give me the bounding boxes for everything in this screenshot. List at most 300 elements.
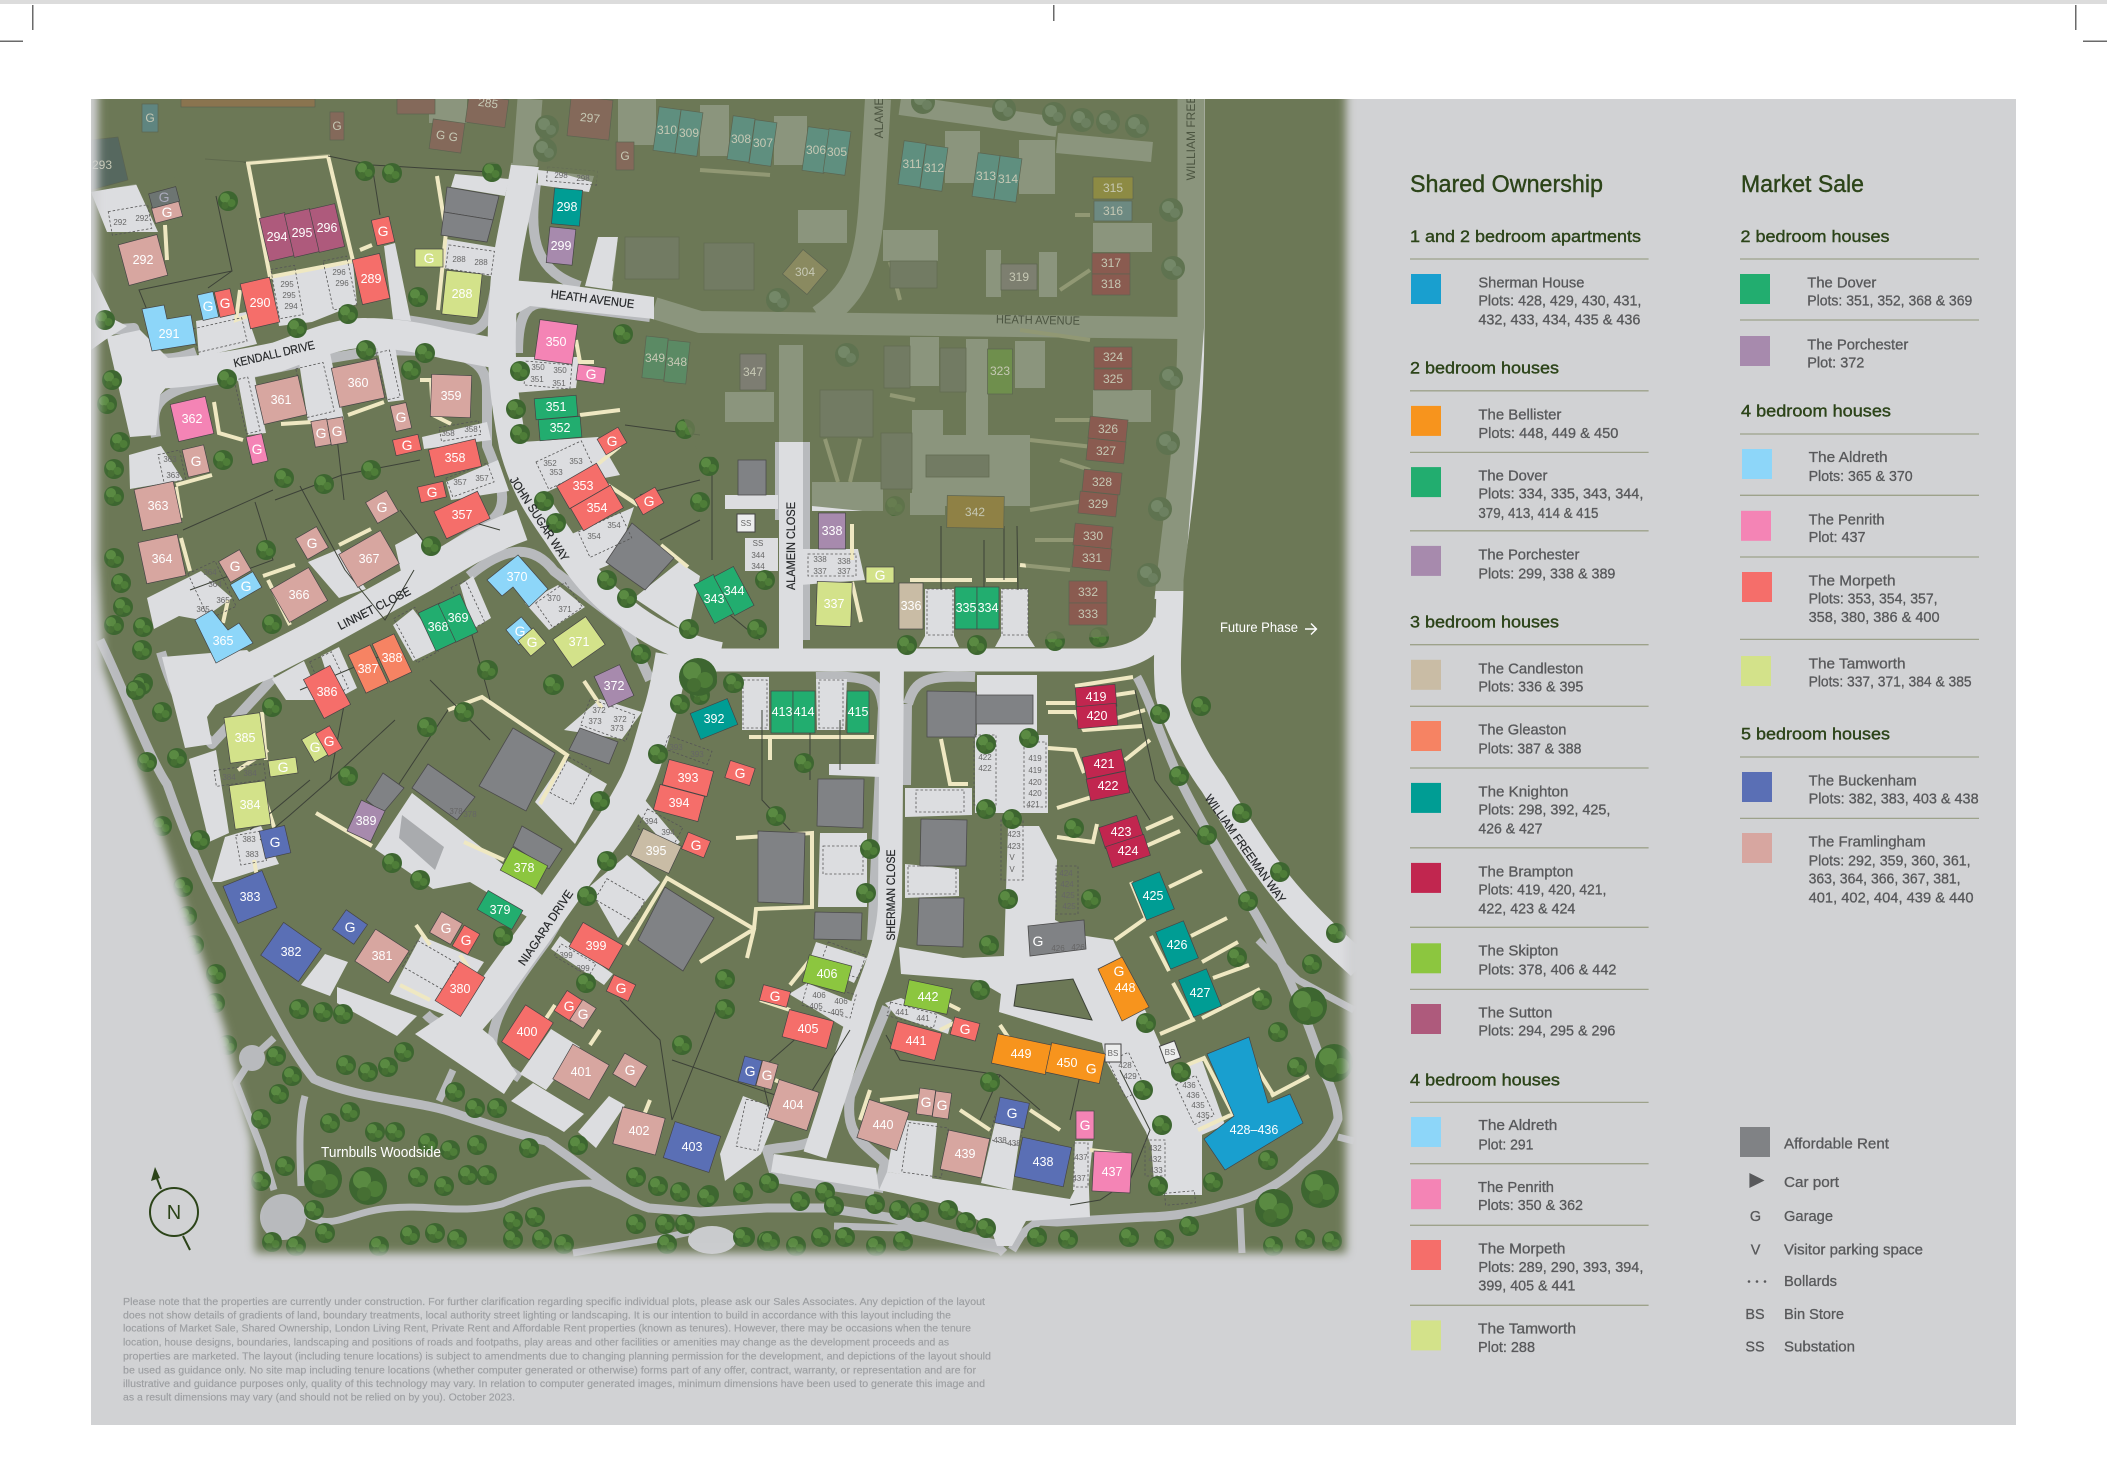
plot 370: 370 xyxy=(507,570,527,584)
faded plots of other phases: 331 xyxy=(1082,551,1102,565)
item: The Penrith xyxy=(1740,511,1979,557)
small parking labels: 420 xyxy=(1028,789,1042,798)
garages: G xyxy=(307,535,317,551)
key: Bollards xyxy=(1748,1274,1837,1290)
item: The Framlingham xyxy=(1742,833,1974,906)
plot 364: 364 xyxy=(152,552,172,566)
plot 386: 386 xyxy=(317,685,337,699)
road names: JOHN SUGAR WAY xyxy=(507,474,572,564)
item: The Morpeth: The Morpeth xyxy=(1809,574,1896,590)
garages: G xyxy=(770,988,780,1004)
faded plots of other phases: 307 xyxy=(753,136,773,150)
small parking labels: 372 xyxy=(613,715,627,724)
small parking labels: 405 xyxy=(830,1008,844,1017)
item: The Knighton: Plots: 298, 392, 425, xyxy=(1478,803,1610,819)
garages: G xyxy=(377,499,387,515)
item: The Bellister: The Bellister xyxy=(1478,407,1562,423)
faded plots of other phases: 319 xyxy=(1009,270,1029,284)
plot 384 xyxy=(229,781,271,829)
plot 299: 299 xyxy=(551,239,571,253)
plot 358 xyxy=(428,439,482,477)
plot 421: 421 xyxy=(1094,757,1114,771)
item: The Porchester: Plot: 372 xyxy=(1807,356,1864,372)
item: The Knighton: 426 & 427 xyxy=(1478,822,1542,838)
faded plots of other phases: HEATH AVENUE xyxy=(996,312,1080,328)
item: The Sutton: Plots: 294, 295 & 296 xyxy=(1478,1024,1615,1040)
plot 449: 449 xyxy=(1011,1047,1031,1061)
plot 392: 392 xyxy=(704,712,724,726)
plot 420 xyxy=(1076,703,1118,729)
garages: G xyxy=(252,441,262,457)
garages: G xyxy=(578,1006,588,1022)
small parking labels: 338 xyxy=(813,555,827,564)
plot 353: 353 xyxy=(573,479,593,493)
garden boundary lines xyxy=(139,156,1200,1205)
plot 450: 450 xyxy=(1057,1056,1077,1070)
small parking labels: 437 xyxy=(1072,1174,1086,1183)
central island xyxy=(1014,979,1092,1020)
key: Affordable Rent xyxy=(1740,1127,1889,1157)
small parking labels: 426 xyxy=(1071,943,1085,952)
small parking labels: 296 xyxy=(335,279,349,288)
item: The Candleston: Plots: 336 & 395 xyxy=(1478,680,1583,696)
key: Substation: SS xyxy=(1745,1339,1765,1355)
small parking labels: 358 xyxy=(464,425,478,434)
garages: G xyxy=(378,223,388,239)
road names: ALAMEIN CLOSE xyxy=(784,502,798,590)
grass base xyxy=(85,90,1365,1270)
item: The Dover: Plots: 351, 352, 368 & 369 xyxy=(1807,294,1972,310)
plot 414: 414 xyxy=(794,705,814,719)
small parking labels: 437 xyxy=(1074,1153,1088,1162)
small parking labels: 399 xyxy=(576,964,590,973)
disclaimer text xyxy=(123,1297,991,1404)
small parking labels: 298 xyxy=(554,171,568,180)
plot 343 xyxy=(693,574,735,624)
substation and bin stores: BS xyxy=(1108,1049,1118,1058)
small parking labels: 338 xyxy=(837,557,851,566)
item: The Tamworth xyxy=(1411,1320,1576,1356)
disclaimer text: locations of Market Sale, Shared Ownership, London Living Rent, Private Rent and Affordable Rent properties (known as tenures). However, there may be occasions when the tenure xyxy=(123,1324,971,1335)
small parking labels: 393 xyxy=(690,750,704,759)
plot 426: 426 xyxy=(1167,938,1187,952)
plot 335: 335 xyxy=(956,601,976,615)
small parking labels: 426 xyxy=(1051,944,1065,953)
faded plots of other phases: 318 xyxy=(1101,277,1121,291)
item: The Penrith: Plot: 437 xyxy=(1809,530,1866,546)
small parking labels: 288 xyxy=(452,255,466,264)
plot 383 xyxy=(223,871,277,923)
plot 399: 399 xyxy=(586,939,606,953)
faded plots of other phases xyxy=(91,93,1198,625)
garages: G xyxy=(396,409,406,425)
garages xyxy=(148,185,1094,1139)
garages: G xyxy=(220,295,230,311)
item: The Dover: Plots: 334, 335, 343, 344, xyxy=(1478,487,1643,503)
item: Sherman House: Plots: 428, 429, 430, 431, xyxy=(1478,294,1641,310)
north compass: N xyxy=(167,1202,181,1224)
plot 362 xyxy=(170,396,214,442)
faded plots of other phases: 317 xyxy=(1101,256,1121,270)
heading: Shared Ownership: Shared Ownership xyxy=(1410,171,1603,198)
item: Sherman House: Sherman House xyxy=(1478,276,1584,292)
item: The Aldreth xyxy=(1740,449,1979,495)
plot 400: 400 xyxy=(517,1025,537,1039)
item: The Gleaston: Plots: 387 & 388 xyxy=(1478,741,1581,757)
garages: G xyxy=(1007,1105,1017,1121)
plot 448: G xyxy=(1114,963,1124,979)
plot 298: 298 xyxy=(557,200,577,214)
plot 371 xyxy=(553,617,605,667)
disclaimer text: Please note that the properties are currently under construction. For further clarification regarding specific individual plots, please ask our Sales Associates. Any depiction of the layout xyxy=(123,1297,985,1308)
small parking labels: 435 xyxy=(1196,1111,1210,1120)
faded plots of other phases: WILLIAM FREE xyxy=(1184,96,1198,180)
small parking labels: 292 xyxy=(135,214,149,223)
item: The Brampton: 422, 423 & 424 xyxy=(1478,902,1575,918)
plot 364 xyxy=(138,534,186,584)
plot 337: 337 xyxy=(824,597,844,611)
small parking labels: 288 xyxy=(474,258,488,267)
small parking labels: 423 xyxy=(1007,830,1021,839)
item: The Brampton xyxy=(1410,863,1649,927)
plot 383: 383 xyxy=(240,890,260,904)
road names: KENDALL DRIVE xyxy=(232,338,316,370)
plot 401 xyxy=(553,1044,609,1100)
plot 415: 415 xyxy=(848,705,868,719)
faded plots of other phases: 297 xyxy=(579,110,601,126)
plot 338: 338 xyxy=(822,524,842,538)
small parking labels: 436 xyxy=(1182,1081,1196,1090)
faded plots of other phases: 309 xyxy=(679,126,699,140)
faded plots of other phases: 310 xyxy=(657,123,677,137)
small parking labels: 393 xyxy=(669,743,683,752)
item: The Porchester xyxy=(1740,336,1909,372)
hard-standing courts and parking xyxy=(91,99,1225,1246)
small parking labels: 353 xyxy=(569,457,583,466)
small parking labels: 394 xyxy=(644,817,658,826)
plot 292: 292 xyxy=(133,253,153,267)
key: Visitor parking space: Visitor parking space xyxy=(1784,1242,1923,1258)
small parking labels: 420 xyxy=(1028,778,1042,787)
plot 352: 352 xyxy=(550,421,570,435)
key: Bollards: Bollards xyxy=(1784,1274,1837,1290)
garages: G xyxy=(762,1067,772,1083)
item: The Tamworth: The Tamworth xyxy=(1809,656,1906,672)
small parking labels xyxy=(113,171,1210,1183)
plot 343: 343 xyxy=(704,592,724,606)
plot 440 xyxy=(857,1099,909,1151)
plot 450 xyxy=(1045,1043,1106,1083)
plot 379: 379 xyxy=(490,903,510,917)
plot 361 xyxy=(255,376,307,424)
plot 405: 405 xyxy=(798,1022,818,1036)
small parking labels: 422 xyxy=(978,753,992,762)
plot 294: 294 xyxy=(267,230,287,244)
plot 388: 388 xyxy=(382,651,402,665)
small parking labels: 435 xyxy=(1191,1101,1205,1110)
plot 419: 419 xyxy=(1086,690,1106,704)
plot 380: 380 xyxy=(450,982,470,996)
faded plots of other phases: 313 xyxy=(976,169,996,183)
item: The Gleaston xyxy=(1410,721,1649,768)
affordable rent houses xyxy=(366,187,1086,971)
plot 422: 422 xyxy=(1098,779,1118,793)
garages: G xyxy=(921,1094,931,1110)
faded plots of other phases: 312 xyxy=(924,161,944,175)
road names: HEATH AVENUE xyxy=(550,287,635,311)
plot 413: 413 xyxy=(772,705,792,719)
garages: G xyxy=(625,1062,635,1078)
garages: G xyxy=(270,834,280,850)
label: Future Phase with arrow: Future Phase xyxy=(1220,620,1298,635)
plot 428-436 Sherman House xyxy=(1204,1037,1303,1170)
garages: G xyxy=(278,759,288,775)
item: The Penrith: The Penrith xyxy=(1809,512,1885,528)
plot 367: 367 xyxy=(359,552,379,566)
garages: G xyxy=(191,453,201,469)
plot 361: 361 xyxy=(271,393,291,407)
plot 381: 381 xyxy=(372,949,392,963)
substation and bin stores: BS xyxy=(1165,1048,1175,1057)
panel: site map xyxy=(85,90,1365,1270)
garages: G xyxy=(527,634,537,650)
plot 382: 382 xyxy=(281,945,301,959)
plot 380 xyxy=(435,962,485,1016)
faded plots of other phases: 326 xyxy=(1098,422,1118,436)
item: The Candleston xyxy=(1410,660,1649,706)
plot 353 xyxy=(557,463,609,509)
garages: G xyxy=(424,250,434,266)
key xyxy=(1740,1127,1923,1355)
plot 386 xyxy=(303,666,351,718)
plot 296: 296 xyxy=(317,221,337,235)
plot 367 xyxy=(339,531,399,587)
garages: G xyxy=(230,558,240,574)
plot 404 xyxy=(767,1079,819,1131)
garages: G xyxy=(461,932,471,948)
small parking labels: 422 xyxy=(978,764,992,773)
road names xyxy=(232,287,1289,968)
small parking labels: 344 xyxy=(751,551,765,560)
item: The Penrith: The Penrith xyxy=(1478,1180,1554,1196)
item: The Morpeth: 358, 380, 386 & 400 xyxy=(1809,610,1940,626)
small parking labels: 350 xyxy=(553,366,567,375)
key: Car port: Car port xyxy=(1784,1175,1839,1191)
plot 392 xyxy=(690,699,738,739)
faded plots of other phases: 304 xyxy=(795,265,815,279)
small parking labels: 373 xyxy=(588,717,602,726)
faded plots of other phases: G G xyxy=(435,128,459,144)
garages: G xyxy=(310,739,320,755)
plot 334: 334 xyxy=(978,601,998,615)
plot 403 xyxy=(663,1122,721,1172)
plot 360: 360 xyxy=(348,376,368,390)
key: Substation: Substation xyxy=(1784,1339,1855,1355)
item: The Bellister: Plots: 448, 449 & 450 xyxy=(1478,426,1618,442)
small parking labels: 372 xyxy=(592,706,606,715)
item: The Framlingham: 363, 364, 366, 367, 381, xyxy=(1809,871,1961,887)
plot 425 xyxy=(1132,872,1174,920)
plot 439 xyxy=(940,1130,990,1178)
item: The Porchester: The Porchester xyxy=(1807,338,1909,354)
road names: NIAGARA DRIVE xyxy=(515,887,576,968)
plot 394: 394 xyxy=(669,796,689,810)
plot 395: 395 xyxy=(646,844,666,858)
small parking labels: 429 xyxy=(1123,1072,1137,1081)
plot 365 xyxy=(195,610,253,663)
faded plots of other phases: 349 xyxy=(645,351,665,365)
legend column: Market Sale xyxy=(1740,171,1979,906)
road names: LINNET CLOSE xyxy=(335,584,413,633)
small parking labels: V xyxy=(1009,865,1015,874)
item: Sherman House: 432, 433, 434, 435 & 436 xyxy=(1478,313,1640,329)
plot 354 xyxy=(571,485,623,531)
item: The Buckenham: The Buckenham xyxy=(1809,774,1917,790)
faded plots of other phases: 330 xyxy=(1083,529,1103,543)
plot 387 xyxy=(348,645,388,693)
faded plots of other phases: 348 xyxy=(667,355,687,369)
item: The Penrith xyxy=(1410,1179,1649,1225)
small parking labels: 354 xyxy=(607,521,621,530)
plot 359 xyxy=(430,374,472,418)
disclaimer text: as a result dimensions may vary (and should not be relied on by you). October 2023. xyxy=(123,1393,515,1404)
plot 442: 442 xyxy=(918,990,938,1004)
item: The Framlingham: Plots: 292, 359, 360, 361, xyxy=(1809,853,1971,869)
plot 394 xyxy=(653,784,705,822)
plot 437 xyxy=(1092,1151,1132,1193)
faded plots of other phases: 323 xyxy=(990,364,1010,378)
plot 425: 425 xyxy=(1143,889,1163,903)
plot 291: 291 xyxy=(159,327,179,341)
small parking labels: 421 xyxy=(1026,800,1040,809)
plot 338 xyxy=(818,513,846,549)
item: The Aldreth: The Aldreth xyxy=(1809,450,1888,466)
garages: G xyxy=(332,423,342,439)
garages: G xyxy=(564,998,574,1014)
plot 336 xyxy=(899,583,923,629)
item: The Tamworth: The Tamworth xyxy=(1478,1322,1576,1338)
small parking labels: 363 xyxy=(163,455,177,464)
small parking labels: 296 xyxy=(332,268,346,277)
small parking labels: 365 xyxy=(196,605,210,614)
item: The Buckenham xyxy=(1740,772,1979,818)
plot 294 xyxy=(259,213,295,261)
plot 366: 366 xyxy=(289,588,309,602)
plot 448: 448 xyxy=(1115,981,1135,995)
garages: G xyxy=(427,484,437,500)
faded plots of other phases: 325 xyxy=(1103,372,1123,386)
plot 296 xyxy=(309,204,345,252)
plot 441 xyxy=(890,1022,942,1060)
plot 344: 344 xyxy=(724,584,744,598)
item: The Porchester: Plots: 299, 338 & 389 xyxy=(1478,567,1615,583)
key: Car port xyxy=(1749,1173,1839,1191)
plot 289: 289 xyxy=(361,272,381,286)
item: The Dover xyxy=(1410,467,1649,531)
plot 354: 354 xyxy=(587,501,607,515)
plot 403: 403 xyxy=(682,1140,702,1154)
plot 402: 402 xyxy=(629,1124,649,1138)
small parking labels: 432 xyxy=(1148,1144,1162,1153)
plot 382 xyxy=(261,922,321,982)
plot 406 xyxy=(802,955,852,993)
disclaimer text: illustrative and guidance purposes only, quality of this technology may vary. In relation to computer generated images, minimum dimensions have been used to generate this image and xyxy=(123,1379,985,1390)
key: Garage: G xyxy=(1750,1209,1761,1225)
small parking labels: 344 xyxy=(751,562,765,571)
garages: G xyxy=(616,980,626,996)
plot 388 xyxy=(372,634,412,682)
plot 369: 369 xyxy=(448,611,468,625)
plot 399 xyxy=(569,922,623,970)
garages: G xyxy=(937,1097,947,1113)
plot 291 xyxy=(142,305,196,351)
plot 350 xyxy=(534,320,578,364)
small parking labels: 383 xyxy=(245,850,259,859)
small parking labels: 364 xyxy=(203,568,217,577)
plot 419 xyxy=(1075,684,1117,710)
small parking labels: 351 xyxy=(552,379,566,388)
plot 415 xyxy=(847,691,869,733)
item: The Morpeth: 399, 405 & 441 xyxy=(1478,1279,1575,1295)
small parking labels: SS xyxy=(753,539,763,548)
small parking labels: 425 xyxy=(1061,891,1075,900)
plot 440: 440 xyxy=(873,1118,893,1132)
plot 379 xyxy=(477,890,523,930)
plot 351 xyxy=(534,395,578,420)
item: The Knighton xyxy=(1410,783,1649,848)
garages: G xyxy=(241,578,251,594)
item: The Buckenham: Plots: 382, 383, 403 & 438 xyxy=(1809,791,1979,807)
item: The Knighton: The Knighton xyxy=(1478,785,1568,801)
plot 424 xyxy=(1106,834,1150,868)
plot 295: 295 xyxy=(292,226,312,240)
plot 357: 357 xyxy=(452,508,472,522)
faded plots of other phases: 324 xyxy=(1103,350,1123,364)
plot 393: 393 xyxy=(678,771,698,785)
plot 357 xyxy=(434,491,490,539)
disclaimer text: location, house designs, boundaries, landscaping and positions of roads and footpaths, play areas and other facilities or amenities may change as the development proceeds and as xyxy=(123,1338,949,1349)
item: The Porchester: The Porchester xyxy=(1478,547,1580,563)
garages: G xyxy=(402,437,412,453)
plot 335 xyxy=(955,587,977,629)
plot 352 xyxy=(538,416,582,441)
item: Sherman House xyxy=(1411,274,1641,329)
plot 378 xyxy=(500,847,548,889)
garages: G xyxy=(441,920,451,936)
cream paths and walls xyxy=(165,156,1309,1155)
plot 360 xyxy=(331,359,385,407)
plot 423: 423 xyxy=(1111,825,1131,839)
small parking labels: 384 xyxy=(222,773,236,782)
small parking labels: 419 xyxy=(1028,754,1042,763)
section: 2 bedroom houses: 2 bedroom houses xyxy=(1410,359,1559,378)
garages: G xyxy=(203,298,213,314)
small parking labels: 357 xyxy=(475,474,489,483)
plot 393 xyxy=(662,759,714,797)
small parking labels: 399 xyxy=(559,951,573,960)
small parking labels: 436 xyxy=(1186,1091,1200,1100)
garages: G xyxy=(1033,933,1043,949)
road names: SHERMAN CLOSE xyxy=(884,850,898,940)
small parking labels: 357 xyxy=(453,478,467,487)
plot 336: 336 xyxy=(901,599,921,613)
small parking labels: 405 xyxy=(809,1002,823,1011)
plot 372: 372 xyxy=(604,679,624,693)
item: The Skipton: The Skipton xyxy=(1478,944,1558,960)
small parking labels: 406 xyxy=(812,991,826,1000)
key: Garage: Garage xyxy=(1784,1209,1833,1225)
item: The Brampton: Plots: 419, 420, 421, xyxy=(1478,883,1606,899)
